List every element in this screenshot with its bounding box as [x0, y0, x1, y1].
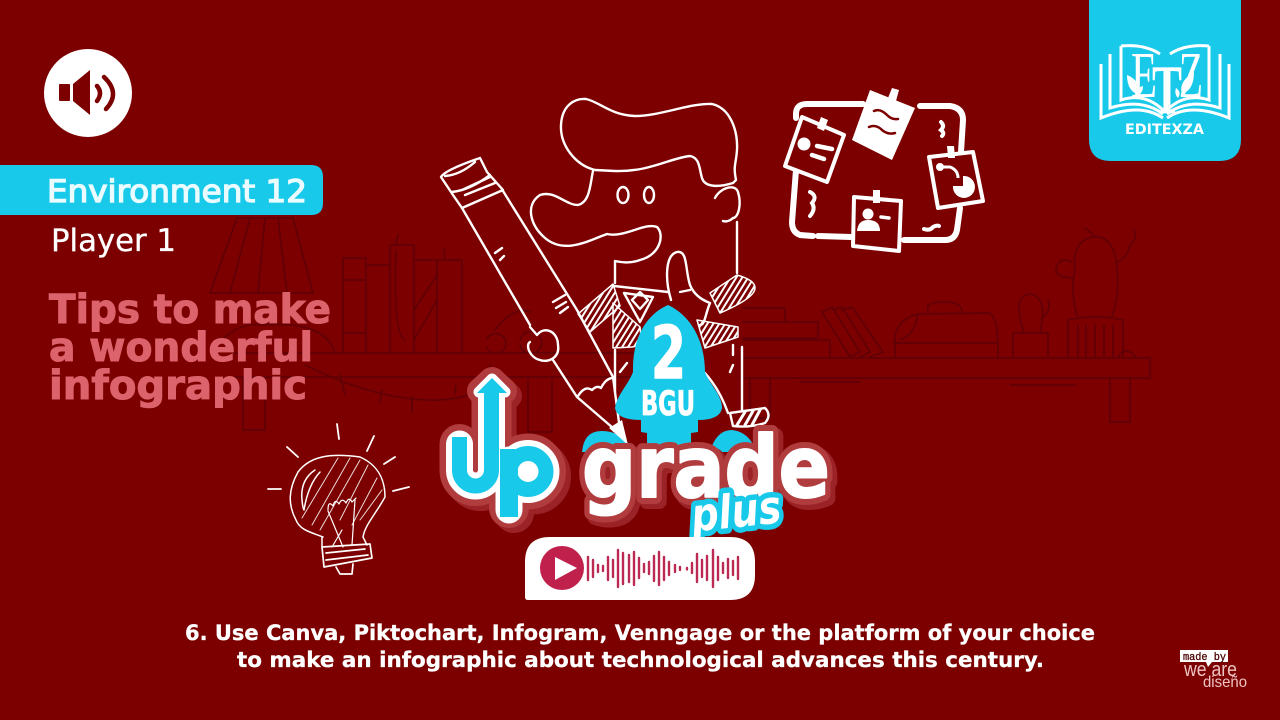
instruction caption: 6. Use Canva, Piktochart, Infogram, Venngage or the platform of your choice: [185, 621, 1095, 646]
play button: [540, 546, 584, 590]
card: profile tilted: [785, 117, 844, 182]
background shelf illustration: [210, 218, 1150, 432]
screw base: [322, 544, 372, 574]
speaker button: [44, 49, 132, 137]
pencil tip over rocket cloud: [609, 420, 628, 445]
nose and ear: [715, 187, 740, 221]
logo word: grade: grade: [582, 418, 830, 518]
shirt hatching: [578, 275, 755, 348]
rocket clouds: [582, 430, 756, 452]
made by badge: we are: [1183, 659, 1237, 681]
editexza logo: EDITEXZA: [1125, 122, 1204, 138]
band layer: [460, 380, 546, 508]
card: solid note: [852, 88, 915, 160]
squiggles: [810, 122, 943, 230]
made by badge: diseño: [1203, 674, 1247, 691]
shelf board: [235, 353, 1150, 385]
shadow layer: [464, 385, 551, 513]
logo letters: [1131, 39, 1203, 129]
large cactus: [1056, 228, 1136, 357]
leaves: [1127, 72, 1194, 98]
character with giant pencil: [441, 99, 768, 430]
glasses: [487, 310, 542, 354]
eyes: [618, 187, 628, 203]
tips heading: [49, 287, 331, 409]
open book: [1101, 46, 1229, 118]
white layer: [460, 379, 546, 510]
instruction caption: to make an infographic about technological advances this century.: [237, 648, 1044, 673]
cyan layer: [460, 390, 546, 517]
waveform: [588, 550, 738, 587]
instruction caption: [185, 621, 1095, 673]
rocket: [582, 305, 756, 455]
logo word: plus: plus: [688, 479, 784, 543]
hair: [561, 99, 737, 186]
board frame: [792, 104, 963, 240]
stacked books right: [743, 307, 883, 357]
shelf brackets: [243, 378, 1130, 432]
editexza logo: [1089, 0, 1241, 161]
logo word: up: [460, 378, 551, 517]
string of lights: [305, 365, 491, 412]
rocket: 2: [651, 311, 686, 395]
tips heading: a wonderful: [49, 325, 313, 371]
body and legs: [615, 345, 742, 413]
filament: [328, 498, 356, 547]
rays: [268, 424, 409, 491]
logo letters: E: [1131, 39, 1157, 112]
pencil eraser: [441, 158, 503, 208]
card: pie chart: [929, 146, 983, 208]
audio player: [525, 537, 755, 600]
environment ribbon: Environment 12: [47, 174, 307, 210]
card: person: [853, 190, 901, 251]
highlight: [302, 470, 320, 510]
player label: Player 1: [51, 223, 176, 259]
made by badge: made by: [1183, 652, 1226, 664]
tips heading: infographic: [49, 363, 307, 409]
hatching: [302, 458, 382, 530]
tie: [624, 292, 653, 322]
face: [531, 171, 737, 283]
books left: [343, 235, 462, 353]
glass: [290, 455, 385, 545]
lamp: [210, 218, 335, 353]
pencil details: [495, 248, 627, 372]
tips heading: Tips to make: [49, 287, 331, 333]
thumb and arm: [667, 252, 710, 325]
teapot: [893, 302, 998, 357]
neck: [321, 537, 323, 547]
foot: [730, 408, 768, 427]
environment ribbon: [0, 165, 323, 215]
hand: [528, 327, 558, 361]
logo word: grade: grade: [582, 418, 830, 518]
made by badge: [1180, 650, 1247, 691]
notes board: [785, 88, 983, 251]
rocket: BGU: [641, 384, 695, 424]
logo letters: T: [1152, 52, 1182, 129]
logo word: grade: grade: [586, 422, 834, 522]
light bulb doodle: [268, 424, 409, 574]
logo word: plus: plus: [688, 479, 784, 543]
logo letters: Z: [1179, 39, 1203, 112]
small cactus: [1013, 294, 1049, 357]
pencil body: [462, 191, 620, 430]
